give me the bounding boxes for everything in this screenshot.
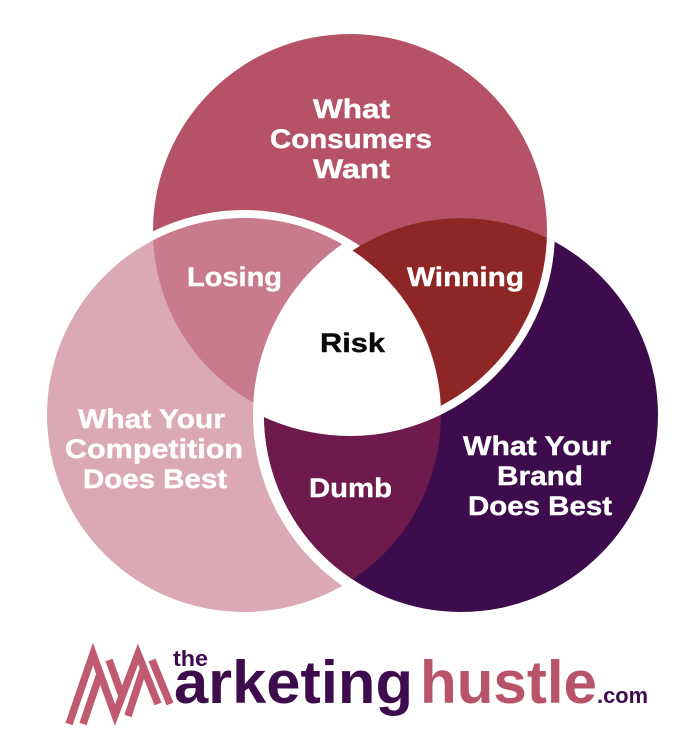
label: what consumers want: Consumers [270, 124, 432, 154]
wordmark: the: the [173, 646, 208, 671]
label: what your brand does best: Brand [497, 461, 583, 491]
ring: consumers circle outline [264, 218, 555, 436]
label: what your brand does best: Does Best [468, 491, 612, 521]
label: what your brand does best: What Your [463, 431, 612, 461]
label: what your competition does best: What Your [78, 404, 226, 434]
wordmark: .com: .com [597, 683, 648, 708]
region: risk centre [253, 244, 441, 428]
region: losing overlap [153, 218, 352, 402]
label: losing: Losing [187, 262, 282, 292]
icon: stylised M [69, 654, 170, 724]
label: dumb: Dumb [309, 473, 392, 503]
label: winning: Winning [407, 262, 524, 292]
label: risk: Risk [320, 328, 386, 358]
label: what consumers want: Want [313, 154, 390, 184]
region: dumb overlap [264, 414, 441, 580]
region: winning overlap [352, 218, 547, 406]
label: what consumers want: What [313, 94, 390, 124]
logo: the marketing hustle [69, 646, 648, 724]
circle: what consumers want [153, 34, 547, 428]
circle: what your competition does best [47, 218, 441, 612]
ring: competition circle outline [39, 210, 449, 620]
label: what your competition does best: Does Best [83, 464, 227, 494]
venn diagram [39, 26, 669, 623]
ring: brand circle outline [253, 244, 352, 586]
label: what consumers want [270, 94, 432, 184]
wordmark: arketing: arketing [174, 649, 413, 716]
wordmark: hustle: hustle [420, 649, 597, 716]
label: what your brand does best [463, 431, 612, 521]
circle: what your brand does best [264, 218, 658, 612]
label: what your competition does best [65, 404, 243, 494]
label: what your competition does best: Competition [65, 434, 243, 464]
